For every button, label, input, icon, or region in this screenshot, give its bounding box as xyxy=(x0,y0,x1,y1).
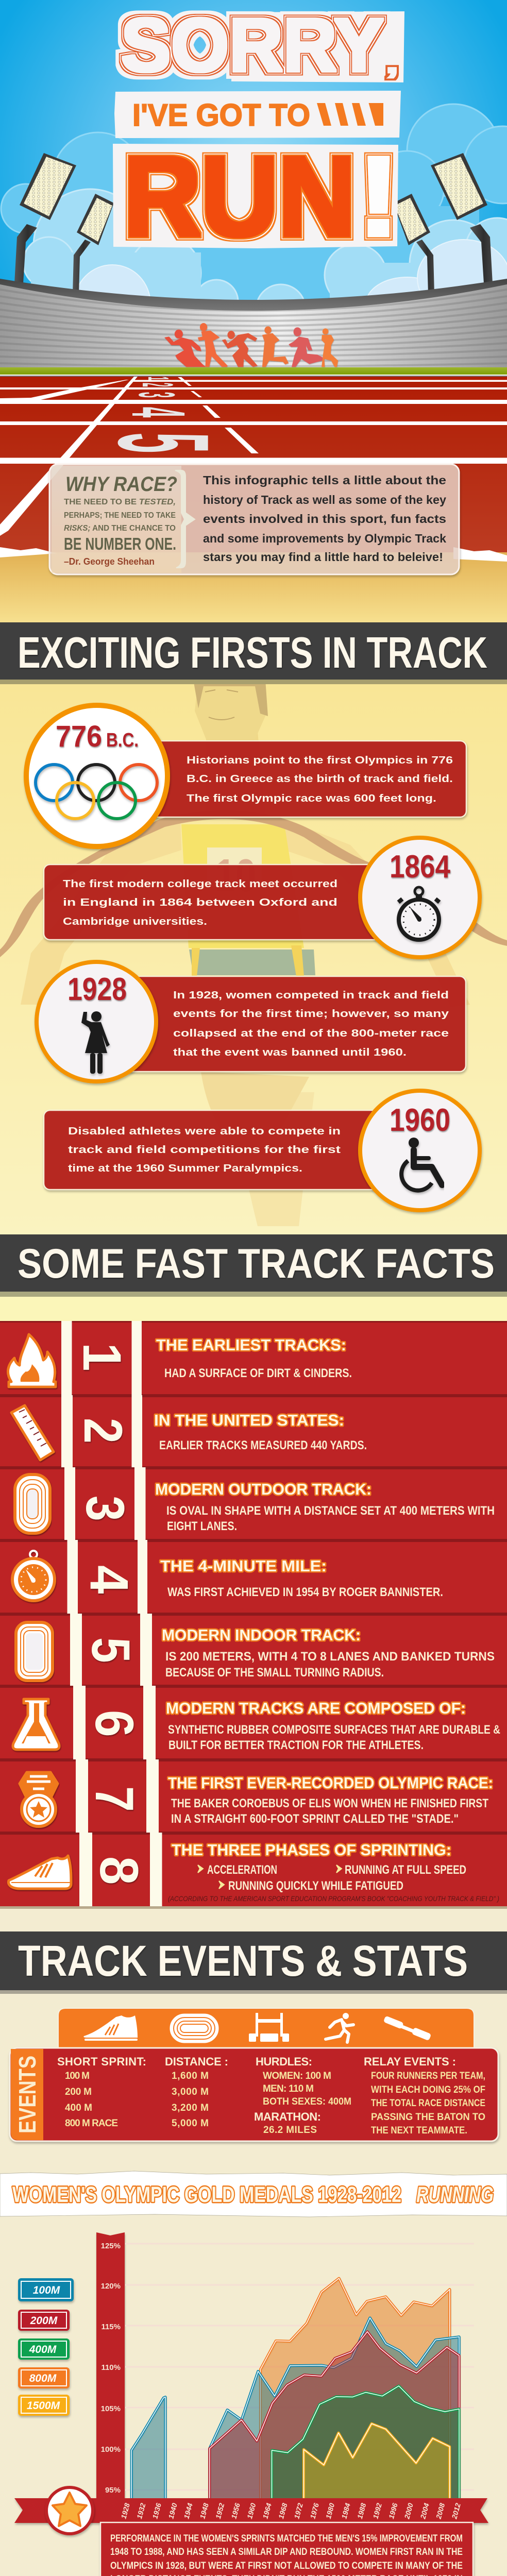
hurdles column: MEN: 110 M xyxy=(263,2083,314,2094)
fact 4: WAS FIRST ACHIEVED IN 1954 BY ROGER BANNISTER. xyxy=(167,1585,443,1599)
intro text: stars you may find a little hard to beleive! xyxy=(203,550,443,564)
lane numbers: 4 xyxy=(116,407,201,417)
women's year ribbon: 2000 xyxy=(402,2502,415,2520)
women's chart legend: 200M xyxy=(30,2315,58,2327)
women's year ribbon: 1960 xyxy=(245,2502,258,2520)
icon: flask xyxy=(13,1699,59,1750)
fact 7 xyxy=(168,1774,493,1826)
series: 800m xyxy=(260,2278,450,2498)
short sprint column: SHORT SPRINT: xyxy=(57,2055,146,2068)
women's year ribbon: 1944 xyxy=(182,2502,194,2520)
women's y axis xyxy=(96,2232,125,2499)
relay column: PASSING THE BATON TO xyxy=(371,2112,485,2123)
hurdles column xyxy=(254,2055,351,2136)
women's year ribbon: 1976 xyxy=(308,2502,320,2520)
panel: 1928: In 1928, women competed in track and field xyxy=(173,990,449,1001)
women's year ribbon: 1996 xyxy=(387,2502,399,2520)
fact 8: RUNNING QUICKLY WHILE FATIGUED xyxy=(228,1879,403,1893)
floodlights right small xyxy=(393,194,434,294)
clouds xyxy=(1,104,507,343)
women's year ribbon: 1936 xyxy=(150,2502,163,2520)
panel: 1864 xyxy=(44,838,480,957)
panel: 1928: collapsed at the end of the 800-meter race xyxy=(173,1028,449,1039)
running track xyxy=(0,375,507,555)
sand xyxy=(0,547,507,622)
women's chart title band: WOMEN'S OLYMPIC GOLD MEDALS 1928-2012 xyxy=(12,2182,401,2207)
fact 8 xyxy=(168,1841,499,1903)
title: run: ! xyxy=(357,133,400,260)
hurdles column: BOTH SEXES: 400M xyxy=(263,2096,351,2107)
women's year ribbon: 1972 xyxy=(292,2502,305,2520)
why race quote: –Dr. George Sheehan xyxy=(64,556,155,567)
why race quote xyxy=(52,466,181,573)
why race quote: BE NUMBER ONE. xyxy=(64,534,176,553)
relay column: WITH EACH DOING 25% OF xyxy=(371,2084,485,2095)
icon: medal xyxy=(20,1772,58,1826)
title: run: RUN xyxy=(124,133,356,260)
women's year ribbon xyxy=(14,2498,488,2523)
fact 2: IN THE UNITED STATES: xyxy=(154,1411,344,1429)
intro text xyxy=(203,473,446,564)
lane numbers: 3 xyxy=(128,392,185,398)
fact 7: IN A STRAIGHT 600-FOOT SPRINT CALLED THE "STADE." xyxy=(171,1812,459,1826)
women's y axis: 115% xyxy=(101,2323,121,2331)
cream background xyxy=(0,1906,507,2576)
icon: oval xyxy=(171,2014,218,2042)
women's y axis: 100% xyxy=(101,2445,121,2454)
fact 2: EARLIER TRACKS MEASURED 440 YARDS. xyxy=(159,1438,367,1452)
icon: indoor track xyxy=(16,1622,53,1681)
icon: running shoe xyxy=(8,1856,71,1889)
panel: 1960: Disabled athletes were able to compete in xyxy=(68,1126,341,1137)
fact 8: RUNNING AT FULL SPEED xyxy=(345,1863,466,1877)
why race quote: WHY RACE? xyxy=(65,473,177,496)
women's chart legend: 400M xyxy=(29,2344,57,2355)
women's year ribbon: 1968 xyxy=(277,2502,289,2520)
row numbers: 8 xyxy=(89,1856,149,1885)
intro text: history of Track as well as some of the key xyxy=(203,493,446,506)
fact 8: THE THREE PHASES OF SPRINTING: xyxy=(172,1841,451,1859)
women's chart legend xyxy=(18,2278,74,2416)
fact 4: THE 4-MINUTE MILE: xyxy=(160,1557,327,1575)
why race quote: THE NEED TO BE TESTED, xyxy=(64,498,176,506)
why race quote: PERHAPS; THE NEED TO TAKE xyxy=(64,511,176,520)
icon: stopwatch xyxy=(397,887,441,940)
fact 1: HAD A SURFACE OF DIRT & CINDERS. xyxy=(164,1366,352,1380)
panel: events xyxy=(10,2048,498,2141)
distance column: 3,200 M xyxy=(172,2103,209,2113)
relay column xyxy=(364,2055,485,2136)
icon: ruler xyxy=(11,1405,54,1460)
women's y axis: 110% xyxy=(101,2363,121,2372)
distance column: DISTANCE : xyxy=(165,2055,228,2068)
icon: flame xyxy=(8,1334,56,1387)
intro panel xyxy=(49,464,459,574)
row numbers: 2 xyxy=(73,1418,133,1444)
short sprint column: 800 M RACE xyxy=(65,2118,118,2129)
brace xyxy=(175,470,195,568)
fact 3: EIGHT LANES. xyxy=(167,1519,237,1533)
intro text: and some improvements by Olympic Track xyxy=(203,532,446,545)
icon: shoe xyxy=(83,2015,138,2041)
fact 1: THE EARLIEST TRACKS: xyxy=(156,1336,346,1354)
why race quote: RISKS; AND THE CHANCE TO xyxy=(64,524,176,533)
women's year ribbon: 1956 xyxy=(229,2502,242,2520)
icon: wheelchair xyxy=(401,1138,442,1191)
short sprint column: 200 M xyxy=(65,2087,92,2097)
women's year ribbon: 1988 xyxy=(356,2502,367,2520)
women's area chart xyxy=(131,2278,459,2498)
ghost runner background xyxy=(0,680,507,1226)
row numbers: 4 xyxy=(79,1565,140,1594)
icon: stopwatch orange xyxy=(12,1551,55,1601)
distance column: 1,600 M xyxy=(172,2071,209,2081)
series: 200m xyxy=(210,2332,459,2498)
lane numbers: 1 xyxy=(142,377,175,380)
women's year ribbon: 1964 xyxy=(261,2502,273,2520)
icon: runner xyxy=(326,2013,353,2042)
fact 8: ACCELERATION xyxy=(207,1863,277,1877)
panel: 1864: The first modern college track meet occurred xyxy=(63,878,337,890)
lane numbers xyxy=(91,377,235,453)
intro text: events involved in this sport, fun facts xyxy=(203,512,446,526)
women's year ribbon: 1980 xyxy=(324,2502,336,2520)
short sprint column xyxy=(57,2055,146,2129)
panel: 776 bc: The first Olympic race was 600 feet long. xyxy=(187,793,436,804)
icon: baton xyxy=(383,2015,431,2041)
section heading: fast facts xyxy=(0,1234,507,1321)
circle badge 1928 xyxy=(37,962,156,1081)
women's chart note xyxy=(100,2522,473,2576)
hurdles column: 26.2 MILES xyxy=(263,2125,317,2136)
lane numbers: 2 xyxy=(133,383,182,387)
series: 1500m xyxy=(303,2424,450,2498)
relay column: THE NEXT TEAMMATE. xyxy=(371,2125,467,2136)
floodlights right big xyxy=(431,153,493,283)
hero sky xyxy=(0,0,507,309)
panel: 1864: in England in 1864 between Oxford and xyxy=(63,897,337,908)
fact 5: MODERN INDOOR TRACK: xyxy=(162,1626,361,1644)
lane numbers: 5 xyxy=(91,433,235,453)
women's y axis: 120% xyxy=(101,2282,121,2291)
women's chart legend: 800M xyxy=(29,2372,57,2384)
distance column: 5,000 M xyxy=(172,2118,209,2129)
women's year ribbon: 2012 xyxy=(450,2502,462,2520)
fact 5 xyxy=(162,1626,495,1680)
women's year ribbon: 2004 xyxy=(418,2502,431,2520)
olympic rings xyxy=(36,765,157,819)
panel: 1928: events for the first time; however, so many xyxy=(173,1008,449,1020)
floodlights left small xyxy=(73,194,114,294)
title: i've got to xyxy=(114,91,401,138)
panel: 1960: time at the 1960 Summer Paralympics. xyxy=(68,1163,302,1174)
icon: oval track xyxy=(15,1475,50,1533)
circle badge 776: B.C. xyxy=(106,730,139,751)
stadium wall xyxy=(0,279,507,371)
circle badge 1960 xyxy=(360,1091,480,1210)
hurdles column: MARATHON: xyxy=(254,2110,321,2123)
fact 4 xyxy=(160,1557,443,1599)
women's chart title band xyxy=(0,2171,507,2217)
fact 1 xyxy=(156,1336,352,1380)
title: i've got to: I'VE GOT TO xyxy=(132,98,310,132)
women's year ribbon: 1928 xyxy=(119,2502,131,2520)
panel: 1928 xyxy=(37,962,466,1081)
women's year ribbon: 2008 xyxy=(434,2502,446,2520)
fact 5: BECAUSE OF THE SMALL TURNING RADIUS. xyxy=(165,1666,384,1680)
short sprint column: 100 M xyxy=(65,2071,90,2081)
intro text: This infographic tells a little about the xyxy=(203,473,446,487)
panel: 1928: that the event was banned until 1960. xyxy=(173,1047,407,1058)
fact 6: MODERN TRACKS ARE COMPOSED OF: xyxy=(166,1699,466,1717)
women's year ribbon: 1940 xyxy=(166,2502,179,2520)
icon: woman xyxy=(81,1011,110,1074)
fact 6 xyxy=(166,1699,500,1752)
women's year ribbon: 1984 xyxy=(340,2502,352,2520)
panel: track facts xyxy=(0,1321,507,1909)
women's year ribbon: 1952 xyxy=(214,2502,226,2520)
row numbers: 1 xyxy=(72,1343,132,1371)
relay column: RELAY EVENTS : xyxy=(364,2055,456,2068)
fact 3: MODERN OUTDOOR TRACK: xyxy=(155,1480,371,1498)
women's year ribbon: 1992 xyxy=(371,2502,383,2520)
events label: EVENTS xyxy=(14,2056,41,2133)
circle badge 1864: 1864 xyxy=(390,849,450,885)
fact 5: IS 200 METERS, WITH 4 TO 8 LANES AND BANKED TURNS xyxy=(165,1650,495,1664)
women's gridlines xyxy=(125,2244,474,2490)
series: 400m xyxy=(272,2386,459,2498)
relay column: THE TOTAL RACE DISTANCE xyxy=(371,2098,485,2109)
fact 2 xyxy=(154,1411,367,1452)
fact 3 xyxy=(155,1480,495,1533)
women's year ribbon: 1932 xyxy=(135,2502,147,2520)
hurdles column: WOMEN: 100 M xyxy=(263,2071,331,2081)
floodlights left big xyxy=(14,153,76,283)
relay column: FOUR RUNNERS PER TEAM, xyxy=(371,2071,485,2081)
women's year ribbon: 1948 xyxy=(198,2502,210,2520)
infield grass strip xyxy=(0,367,507,375)
women's star badge xyxy=(45,2486,94,2535)
panel: 776 bc xyxy=(26,705,466,846)
circle badge 1864 xyxy=(360,838,480,957)
distance column: 3,000 M xyxy=(172,2087,209,2097)
panel: 776 bc: Historians point to the first Olympics in 776 xyxy=(187,755,453,766)
row numbers: 3 xyxy=(75,1496,136,1521)
women's y axis: 105% xyxy=(101,2404,121,2413)
distance column xyxy=(165,2055,228,2129)
row numbers: 7 xyxy=(84,1786,145,1812)
ghost runner background: 10 xyxy=(215,850,256,902)
title: sorry: , xyxy=(385,44,399,80)
panel: 1864: Cambridge universities. xyxy=(63,916,207,927)
silhouettes of runners xyxy=(164,323,338,367)
circle badge 776 xyxy=(26,705,167,846)
women's chart legend: 1500M xyxy=(27,2400,60,2412)
circle badge 1960: 1960 xyxy=(390,1103,450,1138)
section background: firsts xyxy=(0,684,507,1235)
circle badge 776: 776 xyxy=(56,720,102,753)
title: sorry: SORRY xyxy=(121,3,384,88)
row numbers xyxy=(72,1343,149,1885)
panel: 1960 xyxy=(44,1091,480,1210)
panel: 1960: track and field competitions for the first xyxy=(68,1144,341,1156)
hurdles column: HURDLES: xyxy=(256,2055,312,2068)
panel: 776 bc: B.C. in Greece as the birth of track and field. xyxy=(187,773,453,785)
row numbers: 6 xyxy=(84,1710,144,1737)
events icon tab xyxy=(58,2008,474,2050)
women's y axis: 125% xyxy=(101,2242,121,2250)
women's y axis: 95% xyxy=(105,2486,121,2495)
series: 100m xyxy=(131,2318,459,2498)
women's chart legend: 100M xyxy=(33,2284,60,2296)
icon: hurdle xyxy=(249,2013,289,2042)
row numbers: 5 xyxy=(80,1637,141,1663)
circle badge 1928: 1928 xyxy=(67,972,127,1007)
short sprint column: 400 M xyxy=(65,2103,92,2113)
fact 6: BUILT FOR BETTER TRACTION FOR THE ATHLETES. xyxy=(168,1738,424,1752)
